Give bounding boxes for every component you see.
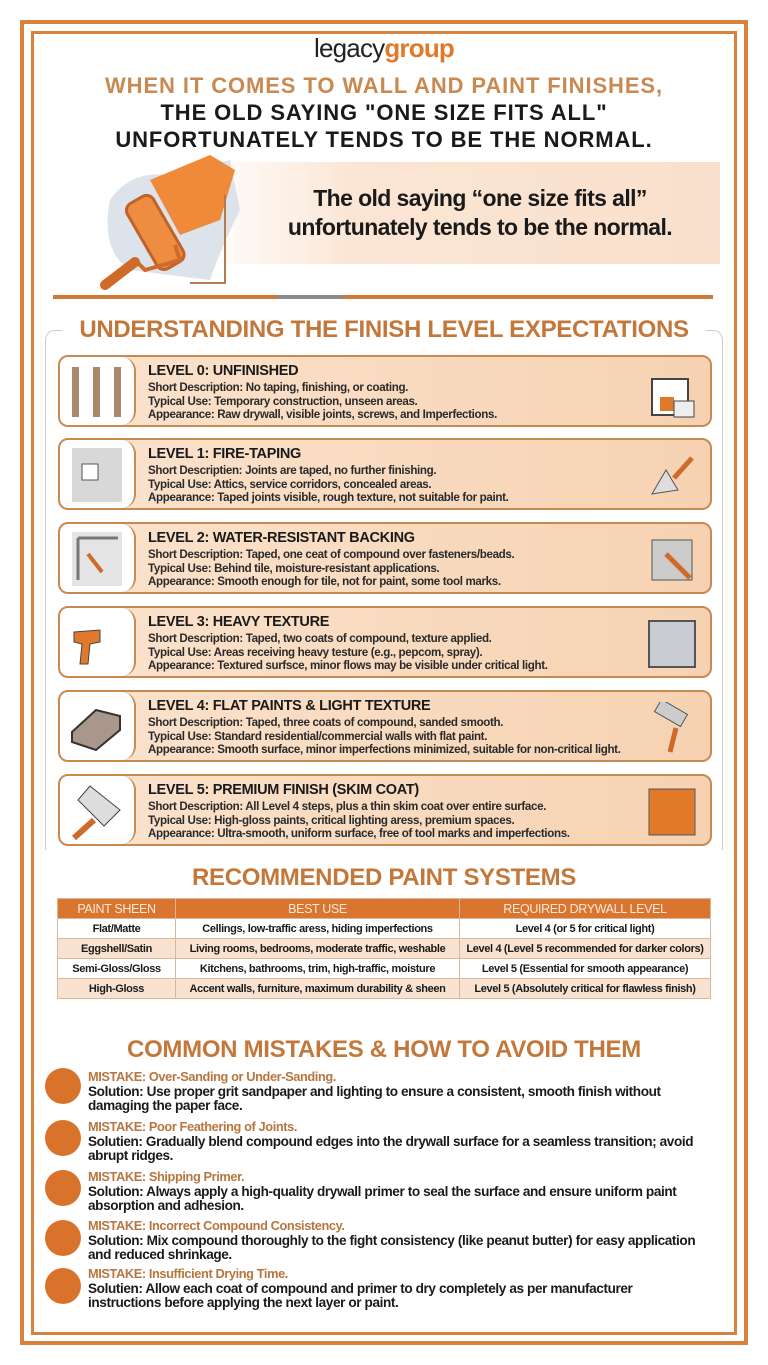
card: level 1: Appearance: Taped joints visible, rough texture, not suitable for paint. xyxy=(148,491,508,504)
text: MISTAKE: Incorrect Compound Consistency. xyxy=(88,1218,345,1233)
mistake 1 xyxy=(45,1068,661,1113)
card: level 2: Short Description: Taped, one ceat of compound over fasteners/beads. xyxy=(148,548,514,561)
title xyxy=(105,73,663,152)
card: level 5 xyxy=(58,774,712,846)
card: level 3: Appearance: Textured surfsce, minor flows may be visible under critical light. xyxy=(148,659,548,672)
card: level 2: Appearance: Smooth enough for tile, not for paint, some tool marks. xyxy=(148,575,501,588)
title: UNFORTUNATELY TENDS TO BE THE NORMAL. xyxy=(115,127,653,152)
banner xyxy=(200,162,720,264)
card: level 1: Short Descriptien: Joints are taped, no further finishing. xyxy=(148,464,436,477)
logo: legacygroup xyxy=(314,33,454,63)
title: THE OLD SAYING "ONE SIZE FITS ALL" xyxy=(160,100,608,125)
heading: finish levels: UNDERSTANDING THE FINISH LEVEL EXPECTATIONS xyxy=(79,316,689,343)
divider xyxy=(53,295,713,299)
text: abrupt ridges. xyxy=(88,1148,173,1163)
mistake 3 xyxy=(45,1169,677,1213)
table xyxy=(57,898,711,999)
table: Eggshell/Satin xyxy=(81,942,152,954)
card: level 3: Typical Use: Areas receiving heavy testure (e.g., pepcom, spray). xyxy=(148,646,482,658)
mistake 2 xyxy=(45,1119,693,1163)
mistake 5 xyxy=(45,1266,633,1310)
banner: unfortunately tends to be the normal. xyxy=(288,214,672,240)
card: level 5: LEVEL 5: PREMIUM FINISH (SKIM COAT) xyxy=(148,782,419,798)
table: PAINT SHEEN xyxy=(77,902,156,916)
card: level 4: Typical Use: Standard residential/commercial walls with flat paint. xyxy=(148,730,487,742)
title: WHEN IT COMES TO WALL AND PAINT FINISHES, xyxy=(105,73,663,98)
card: level 2 xyxy=(58,522,712,594)
text: damaging the paper face. xyxy=(88,1098,242,1113)
card: level 4: Appearance: Smooth surface, minor imperfections minimized, suitable for non-critical light. xyxy=(148,743,621,756)
card: level 2: LEVEL 2: WATER-RESISTANT BACKING xyxy=(148,530,415,546)
card: level 4: LEVEL 4: FLAT PAINTS & LIGHT TEXTURE xyxy=(148,698,430,714)
text: Solutien: Gradually blend compound edges into the drywall surface for a seamless transition; avoid xyxy=(88,1134,693,1148)
table: REQUIRED DRYWALL LEVEL xyxy=(503,902,667,916)
text: instructions before applying the next layer or paint. xyxy=(88,1295,398,1310)
card: level 5: Short Description: All Level 4 steps, plus a thin skim coat over entire surface. xyxy=(148,800,546,813)
card: level 5: Appearance: Ultra-smooth, uniform surface, free of tool marks and imperfections. xyxy=(148,827,570,840)
text: Solution: Always apply a high-quality drywall primer to seal the surface and ensure uniform paint xyxy=(88,1184,676,1198)
table: High-Gloss xyxy=(89,982,144,994)
card: level 0: Short Description: No taping, finishing, or coating. xyxy=(148,381,408,394)
text: MISTAKE: Insufficient Drying Time. xyxy=(88,1266,288,1281)
table: Level 4 (Level 5 recommended for darker colors) xyxy=(466,942,704,954)
heading: paint systems: RECOMMENDED PAINT SYSTEMS xyxy=(192,864,576,891)
card: level 3: LEVEL 3: HEAVY TEXTURE xyxy=(148,614,329,630)
table: Cellings, low-traffic aress, hiding imperfections xyxy=(202,922,433,934)
card: level 0: LEVEL 0: UNFINISHED xyxy=(148,363,298,379)
card: level 0: Appearance: Raw drywall, visible joints, screws, and Imperfections. xyxy=(148,408,497,421)
text: and reduced shrinkage. xyxy=(88,1247,232,1262)
card: level 5: Typical Use: High-gloss paints, critical lighting aress, premium spaces. xyxy=(148,814,514,826)
table: Accent walls, furniture, maximum durability & sheen xyxy=(190,982,446,994)
text: Solution: Use proper grit sandpaper and lighting to ensure a consistent, smooth finish without xyxy=(88,1084,661,1098)
card: level 4: Short Description: Taped, three coats of compound, sanded smooth. xyxy=(148,716,503,729)
card: level 2: Typical Use: Behind tile, moisture-resistant applications. xyxy=(148,562,439,574)
table: Level 5 (Essential for smooth appearance) xyxy=(482,962,688,974)
table: Flat/Matte xyxy=(93,922,140,934)
icon: paint roller xyxy=(100,155,240,290)
table: Living rooms, bedrooms, moderate traffic, weshable xyxy=(190,942,445,954)
card: level 3: Short Description: Taped, two coats of compound, texture applied. xyxy=(148,632,492,645)
card: level 4 xyxy=(58,690,712,762)
text: absorption and adhesion. xyxy=(88,1198,244,1213)
heading: mistakes: COMMON MISTAKES & HOW TO AVOID THEM xyxy=(127,1036,641,1063)
table: Semi-Gloss/Gloss xyxy=(72,962,161,974)
text: MISTAKE: Poor Feathering of Joints. xyxy=(88,1119,297,1134)
table: Level 4 (or 5 for critical light) xyxy=(516,922,654,934)
table: Level 5 (Absolutely critical for flawless finish) xyxy=(474,982,696,994)
text: Solutien: Allow each coat of compound and primer to dry completely as per manufacturer xyxy=(88,1280,632,1296)
text: Solution: Mix compound thoroughly to the fight consistency (like peanut butter) for easy application xyxy=(88,1232,695,1248)
card: level 1: Typical Use: Attics, service corridors, concealed areas. xyxy=(148,478,431,490)
card: level 0: Typical Use: Temporary construction, unseen areas. xyxy=(148,394,417,408)
card: level 1: LEVEL 1: FIRE-TAPING xyxy=(148,446,301,462)
table: BEST USE xyxy=(288,902,347,916)
banner: The old saying “one size fits all” xyxy=(313,185,647,211)
card: level 0 xyxy=(58,355,712,427)
text: MISTAKE: Over-Sanding or Under-Sanding. xyxy=(88,1069,336,1084)
text: MISTAKE: Shipping Primer. xyxy=(88,1169,244,1184)
card: level 1 xyxy=(58,438,712,510)
card: level 3 xyxy=(58,606,712,678)
mistake 4 xyxy=(45,1218,695,1262)
table: Kitchens, bathrooms, trim, high-traffic, moisture xyxy=(200,962,435,974)
